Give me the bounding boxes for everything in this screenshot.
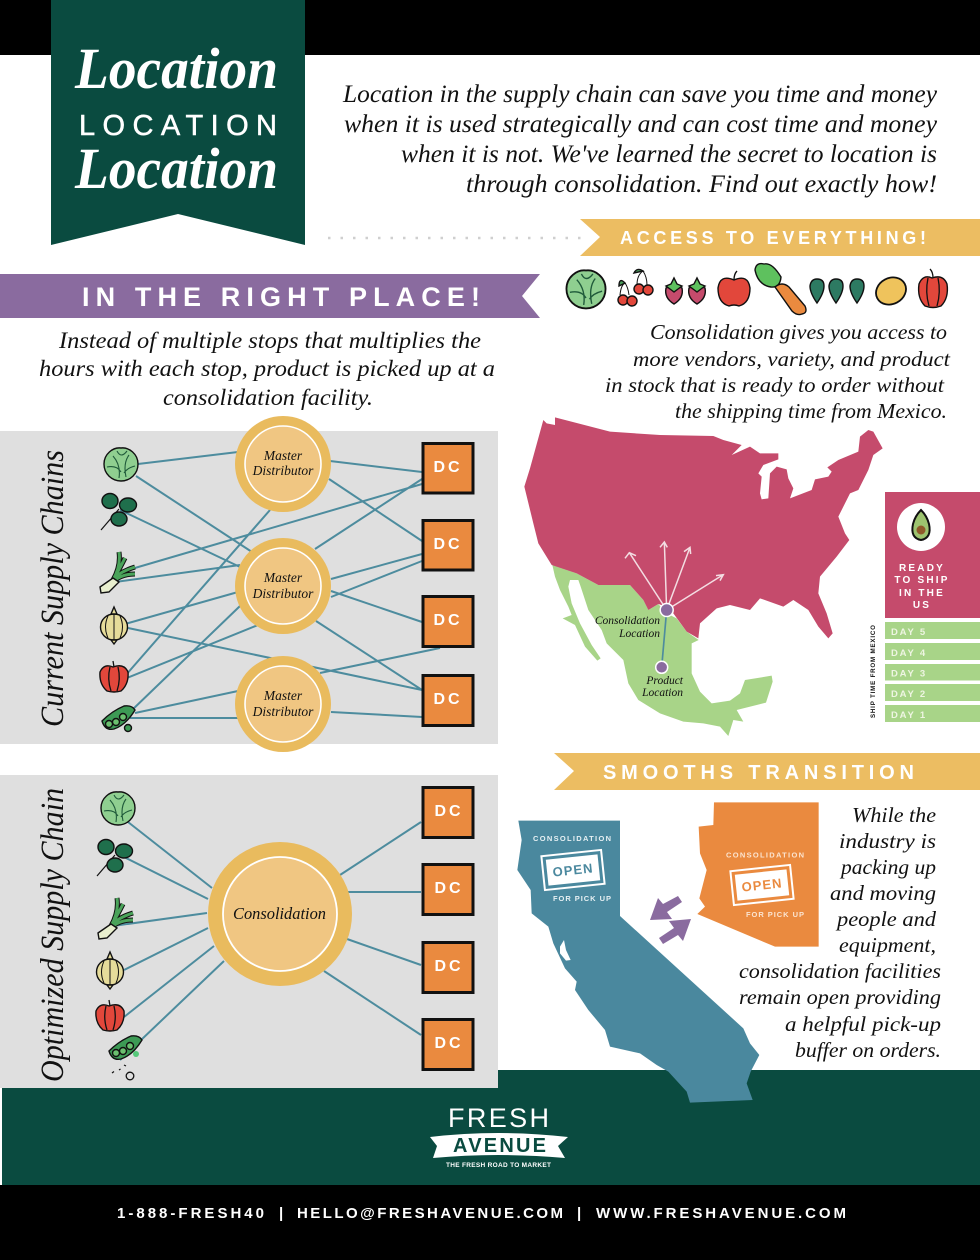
open sign bbox=[730, 865, 794, 905]
ship time bars: DAY 4 bbox=[891, 648, 927, 659]
transition text: and moving bbox=[830, 881, 936, 905]
california: CONSOLIDATION bbox=[533, 834, 611, 843]
footer contact text bbox=[117, 1205, 846, 1222]
transition text: people and bbox=[835, 907, 936, 931]
map labels: Location bbox=[641, 687, 683, 699]
footer contact text: HELLO@FRESHAVENUE.COM bbox=[297, 1205, 563, 1222]
transition text: consolidation facilities bbox=[739, 959, 941, 983]
master distributor 1 bbox=[235, 416, 331, 512]
DC boxes bbox=[423, 788, 473, 1070]
top black band bbox=[0, 0, 980, 55]
open sign bbox=[541, 850, 605, 890]
transition text: equipment, bbox=[839, 933, 936, 957]
icon: pea pod bbox=[102, 706, 135, 732]
panel: optimized supply chain: Optimized Supply Chain bbox=[35, 788, 71, 1082]
master distributor 3: Master bbox=[263, 688, 303, 703]
icon: avocado bbox=[912, 510, 930, 540]
banner: smooths transition bbox=[554, 753, 980, 790]
transition text bbox=[739, 803, 941, 1062]
panel: current supply chains: Current Supply Chains bbox=[35, 450, 71, 727]
icon: cilantro bbox=[97, 840, 132, 876]
arizona: FOR PICK UP bbox=[746, 910, 804, 919]
banner: access to everything bbox=[580, 219, 980, 256]
title banner: LOCATION bbox=[79, 110, 277, 142]
arizona bbox=[697, 802, 819, 947]
access text: in stock that is ready to order without bbox=[605, 373, 945, 397]
ready to ship block: US bbox=[913, 600, 931, 611]
ready to ship block bbox=[885, 492, 980, 618]
transition text: packing up bbox=[839, 855, 936, 879]
master distributor 3: Distributor bbox=[252, 704, 314, 719]
icon: cilantro bbox=[101, 494, 136, 530]
icon: onion bbox=[100, 607, 128, 644]
footer contact text: | bbox=[577, 1205, 581, 1222]
access text bbox=[605, 320, 951, 423]
footer black band bbox=[0, 1185, 980, 1260]
ready to ship block: READY bbox=[899, 563, 945, 574]
icon: scallion bbox=[100, 552, 135, 593]
master distributor 2: Master bbox=[263, 570, 303, 585]
DC boxes: DC bbox=[434, 958, 464, 975]
right place text: Instead of multiple stops that multiplies the bbox=[58, 328, 481, 353]
map labels bbox=[595, 615, 684, 699]
intro text: through consolidation. Find out exactly how! bbox=[466, 171, 937, 198]
map: USA and Mexico bbox=[524, 417, 883, 736]
ready to ship block: TO SHIP bbox=[894, 575, 950, 586]
open sign: OPEN bbox=[741, 875, 783, 895]
title banner bbox=[51, 0, 305, 245]
logo bbox=[430, 1103, 568, 1169]
product location dot bbox=[656, 661, 668, 673]
banner: access to everything: ACCESS TO EVERYTHING! bbox=[620, 228, 926, 248]
transition text: buffer on orders. bbox=[795, 1038, 941, 1062]
DC boxes: DC bbox=[433, 459, 463, 476]
california bbox=[517, 821, 759, 1103]
master distributor 3 bbox=[235, 656, 331, 752]
transition text: industry is bbox=[839, 829, 936, 853]
access text: more vendors, variety, and product bbox=[633, 347, 951, 371]
panel: current supply chains bbox=[0, 416, 498, 752]
DC boxes: DC bbox=[434, 803, 464, 820]
ready to ship block: IN THE bbox=[899, 588, 945, 599]
arizona: CONSOLIDATION bbox=[726, 850, 804, 860]
arrows from consolidation location bbox=[625, 542, 723, 667]
access text: the shipping time from Mexico. bbox=[675, 399, 947, 423]
banner: smooths transition: SMOOTHS TRANSITION bbox=[603, 762, 914, 784]
ship time bars: DAY 3 bbox=[891, 668, 927, 680]
logo: THE FRESH ROAD TO MARKET bbox=[446, 1162, 551, 1169]
right place text: consolidation facility. bbox=[163, 385, 373, 410]
icon: onion bbox=[96, 952, 124, 989]
ship time bars bbox=[870, 622, 980, 722]
master distributor 1: Master bbox=[263, 448, 303, 463]
banner: in the right place: IN THE RIGHT PLACE! bbox=[82, 282, 480, 312]
consolidation location dot bbox=[660, 604, 673, 616]
produce icon row bbox=[566, 264, 947, 315]
icon: pepper bbox=[100, 661, 128, 692]
icon: scallion bbox=[98, 898, 133, 939]
transition text: remain open providing bbox=[739, 985, 941, 1009]
icon: pea pod bbox=[109, 1036, 142, 1080]
arrows: between states bbox=[650, 896, 691, 944]
consolidation circle bbox=[208, 842, 352, 986]
transition text: While the bbox=[852, 803, 936, 827]
logo: FRESH bbox=[448, 1103, 549, 1133]
open sign: OPEN bbox=[552, 860, 594, 880]
footer green band bbox=[2, 1070, 980, 1185]
logo: AVENUE bbox=[453, 1135, 546, 1157]
master distributor 2: Distributor bbox=[252, 586, 314, 601]
icon: cabbage bbox=[101, 792, 135, 825]
access text: Consolidation gives you access to bbox=[650, 320, 947, 344]
master distributor 1: Distributor bbox=[252, 463, 314, 478]
map labels: Consolidation bbox=[595, 615, 660, 627]
icon: cabbage bbox=[104, 448, 138, 481]
transition text: a helpful pick-up bbox=[785, 1012, 941, 1036]
consolidation circle: Consolidation bbox=[233, 904, 326, 923]
title banner: Location bbox=[74, 36, 278, 101]
DC boxes: DC bbox=[434, 880, 464, 897]
footer contact text: 1-888-FRESH40 bbox=[117, 1205, 264, 1222]
DC boxes bbox=[423, 444, 473, 726]
ship time bars: DAY 2 bbox=[891, 689, 927, 700]
title banner: Location bbox=[74, 136, 278, 201]
intro text: when it is used strategically and can cost time and money bbox=[344, 111, 938, 138]
footer contact text: | bbox=[279, 1205, 283, 1222]
map labels: Product bbox=[645, 675, 684, 687]
ship time bars: DAY 5 bbox=[891, 627, 927, 638]
intro text: when it is not. We've learned the secret to location is bbox=[401, 141, 937, 168]
intro text: Location in the supply chain can save you time and money bbox=[342, 81, 938, 108]
footer contact text: WWW.FRESHAVENUE.COM bbox=[596, 1205, 846, 1222]
ship time bars: SHIP TIME FROM MEXICO bbox=[870, 625, 877, 718]
icon: pepper bbox=[96, 1000, 124, 1031]
DC boxes: DC bbox=[433, 612, 463, 629]
california: FOR PICK UP bbox=[553, 894, 611, 903]
banner: in the right place bbox=[0, 274, 540, 318]
right place text: hours with each stop, product is picked up at a bbox=[39, 356, 495, 381]
intro text bbox=[342, 81, 938, 198]
DC boxes: DC bbox=[433, 691, 463, 708]
panel: optimized supply chain bbox=[0, 775, 498, 1088]
master distributor 2 bbox=[235, 538, 331, 634]
DC boxes: DC bbox=[434, 1035, 464, 1052]
DC boxes: DC bbox=[433, 536, 463, 553]
ship time bars: DAY 1 bbox=[891, 710, 927, 721]
right place text bbox=[39, 328, 495, 410]
map labels: Location bbox=[618, 628, 660, 640]
